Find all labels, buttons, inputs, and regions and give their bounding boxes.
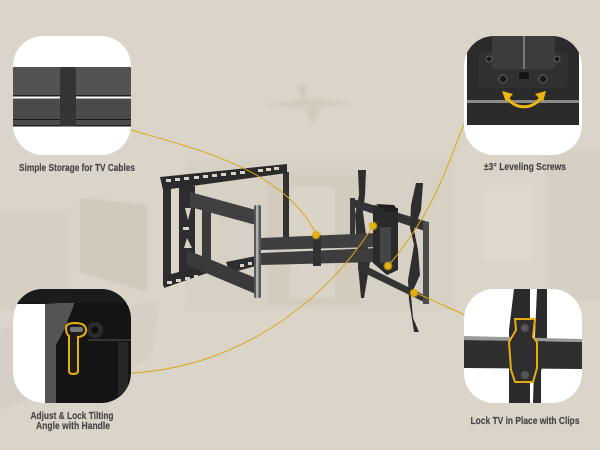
icon: highlighted clip	[509, 319, 537, 382]
TV bracket centre	[373, 204, 398, 275]
TV bracket rear	[350, 170, 429, 332]
heading: tilt handle: Adjust & Lock Tilting	[30, 410, 114, 422]
icon: highlighted handle	[66, 323, 86, 374]
wall plate	[160, 164, 289, 288]
callout dots	[311, 221, 419, 298]
panel: tilt handle	[13, 289, 131, 403]
icon: curved double arrow	[502, 91, 546, 107]
inner arms	[187, 192, 261, 298]
cable strap	[313, 235, 321, 266]
wall mount arm product	[160, 164, 429, 332]
panel: TV clips	[464, 289, 582, 403]
outer arms	[261, 233, 377, 265]
icon: velcro strap	[60, 67, 76, 126]
heading: tilt handle line 2: Angle with Handle	[36, 420, 110, 432]
panel: leveling screws	[464, 36, 582, 155]
callout leader lines	[131, 118, 468, 373]
heading: leveling screws: ±3° Leveling Screws	[484, 161, 566, 173]
panel: cable storage	[13, 36, 131, 155]
heading: cable storage: Simple Storage for TV Cables	[19, 162, 135, 174]
